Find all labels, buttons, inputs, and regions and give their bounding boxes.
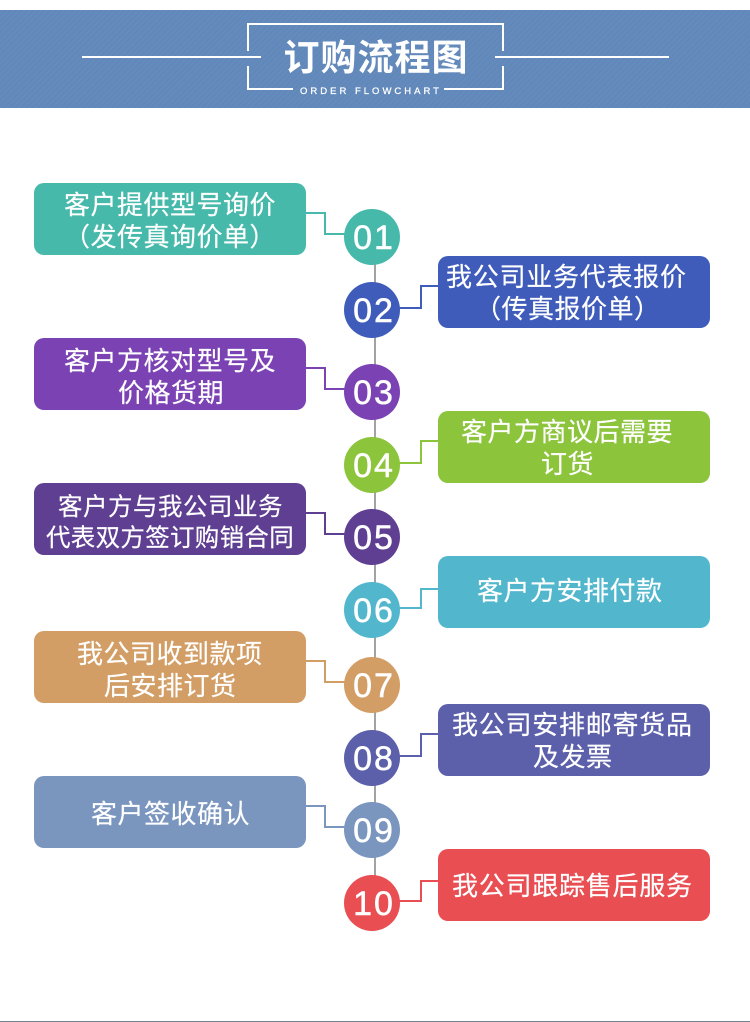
step 09: 客户签收确认 (91, 799, 250, 829)
step 08: 08 (353, 740, 395, 778)
step 05: 代表双方签订购销合同 (46, 524, 294, 552)
step 01: 客户提供型号询价 (64, 190, 276, 220)
step 08 (344, 704, 710, 786)
step 01: （发传真询价单） (64, 222, 276, 252)
step 03: 价格货期 (118, 378, 224, 408)
title: 订购流程图 (283, 37, 469, 78)
step 08: 及发票 (533, 742, 613, 772)
step 07: 07 (353, 667, 395, 705)
step 02: （传真报价单） (475, 294, 661, 324)
step 06: 06 (353, 592, 395, 630)
step 05: 客户方与我公司业务 (58, 493, 283, 521)
timeline spine (374, 237, 376, 903)
step 10 (344, 849, 710, 931)
step 10: 10 (353, 885, 395, 923)
step 08: 我公司安排邮寄货品 (452, 710, 693, 740)
step 03 (34, 338, 400, 420)
title frame (82, 24, 669, 89)
step 09 (34, 776, 400, 858)
step 04: 客户方商议后需要 (461, 417, 673, 447)
step 10: 我公司跟踪售后服务 (452, 871, 693, 901)
step 04: 订货 (541, 449, 594, 479)
step 04 (344, 411, 710, 493)
step 07: 后安排订货 (104, 671, 237, 701)
step 03: 客户方核对型号及 (64, 346, 276, 376)
header banner (0, 10, 750, 108)
step 02 (344, 256, 710, 338)
step 05: 05 (353, 519, 395, 557)
step 06 (344, 556, 710, 638)
step 01 (34, 183, 400, 265)
step 05 (34, 483, 400, 565)
step 02: 02 (353, 292, 395, 330)
step 01: 01 (353, 219, 395, 257)
step 07 (34, 631, 400, 713)
step 04: 04 (353, 447, 395, 485)
bottom rule (0, 1021, 750, 1022)
step 07: 我公司收到款项 (77, 639, 263, 669)
step 06: 客户方安排付款 (477, 576, 663, 606)
subtitle: ORDER FLOWCHART (300, 86, 442, 97)
step 03: 03 (353, 374, 395, 412)
step 09: 09 (353, 812, 395, 850)
step 02: 我公司业务代表报价 (446, 262, 687, 292)
